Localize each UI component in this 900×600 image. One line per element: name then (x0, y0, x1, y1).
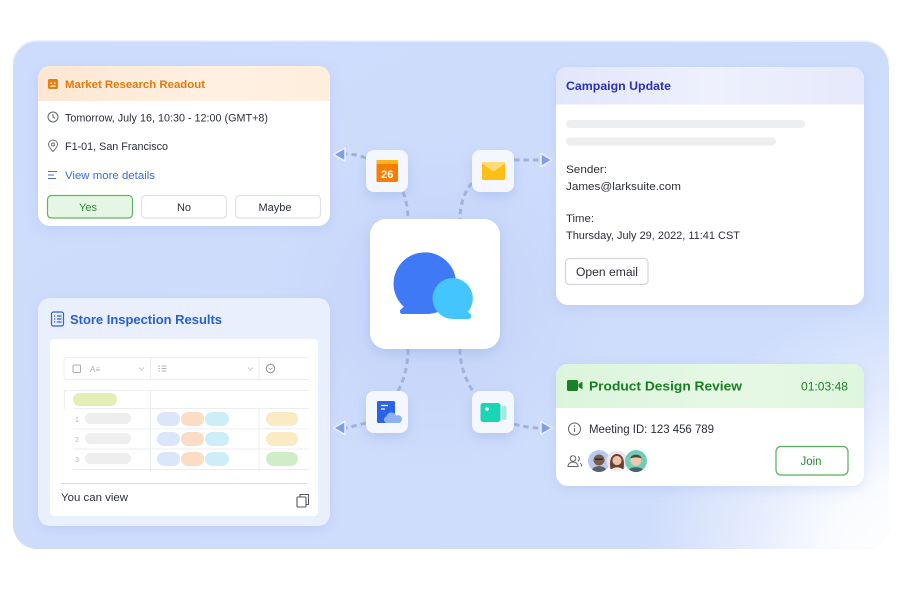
button: Yes: Yes (79, 202, 97, 214)
icon tile: video (472, 391, 514, 433)
icon: chat bubbles (394, 252, 473, 319)
arrow: to event card (334, 148, 345, 161)
icon: details list (48, 172, 57, 178)
time details: Time: (566, 213, 594, 225)
table row 3 (75, 452, 298, 466)
button: Maybe: Maybe (258, 202, 292, 214)
sender details: Sender: (566, 164, 607, 176)
view more details link: View more details (65, 170, 156, 182)
panel: Store Inspection Results card (38, 298, 330, 526)
button: Maybe (236, 196, 320, 218)
button: Join (776, 446, 848, 475)
table row 3: 3 (75, 457, 79, 464)
icon: video camera (567, 380, 582, 391)
icon: copy (297, 494, 308, 507)
table row 2 (75, 432, 298, 446)
button: No (142, 196, 226, 218)
icon: sheet (52, 312, 64, 326)
icon: clock (48, 112, 58, 122)
table grid (64, 390, 309, 472)
table row 1: 1 (75, 417, 79, 424)
event title: Market Research Readout (65, 79, 205, 91)
connector lines (346, 154, 540, 428)
meeting title: Product Design Review (589, 378, 743, 394)
meeting ID: Meeting ID: 123 456 789 (589, 424, 714, 436)
icon: info (568, 423, 580, 435)
sender details: James@larksuite.com (566, 181, 681, 193)
table group pill (73, 393, 117, 406)
table row 2: 2 (75, 437, 79, 444)
event time: Tomorrow, July 16, 10:30 - 12:00 (GMT+8) (65, 112, 268, 124)
arrow: to email card (541, 154, 552, 166)
button: Open email (566, 258, 648, 284)
sender details (566, 164, 681, 193)
table header row (64, 358, 309, 380)
permission note: You can view (61, 492, 128, 504)
avatars (588, 450, 647, 472)
button: No: No (177, 202, 191, 214)
button: Yes (48, 196, 132, 218)
button: Open email: Open email (576, 267, 638, 279)
icon: location pin (48, 140, 58, 152)
arrow: to docs card (334, 422, 345, 434)
icon tile: calendar: 26 (381, 169, 393, 181)
meeting timer: 01:03:48 (801, 380, 848, 394)
email title: Campaign Update (566, 79, 671, 93)
time details (566, 213, 740, 242)
table row 1 (75, 412, 298, 426)
time details: Thursday, July 29, 2022, 11:41 CST (566, 230, 740, 242)
icon tile: cloud document (366, 391, 408, 433)
card title: Store Inspection Results (70, 312, 222, 327)
icon tile: calendar (366, 150, 408, 192)
central messenger tile (370, 219, 500, 349)
avatar 2 (606, 450, 628, 472)
event location: F1-01, San Francisco (65, 141, 168, 153)
icon: event header (48, 79, 58, 89)
avatar 1 (588, 450, 610, 472)
panel: Campaign Update email card (556, 67, 864, 305)
icon: participants (568, 456, 582, 466)
table header row: A≡ (90, 365, 100, 374)
email preview placeholder (566, 120, 805, 146)
button: Join: Join (800, 456, 822, 468)
icon tile: mail (472, 150, 514, 192)
avatar 3 (625, 450, 647, 472)
arrow: to meeting card (541, 422, 552, 434)
panel: Market Research Readout event card (38, 66, 330, 226)
panel: Product Design Review meeting card (556, 364, 864, 486)
table preview (50, 339, 318, 516)
